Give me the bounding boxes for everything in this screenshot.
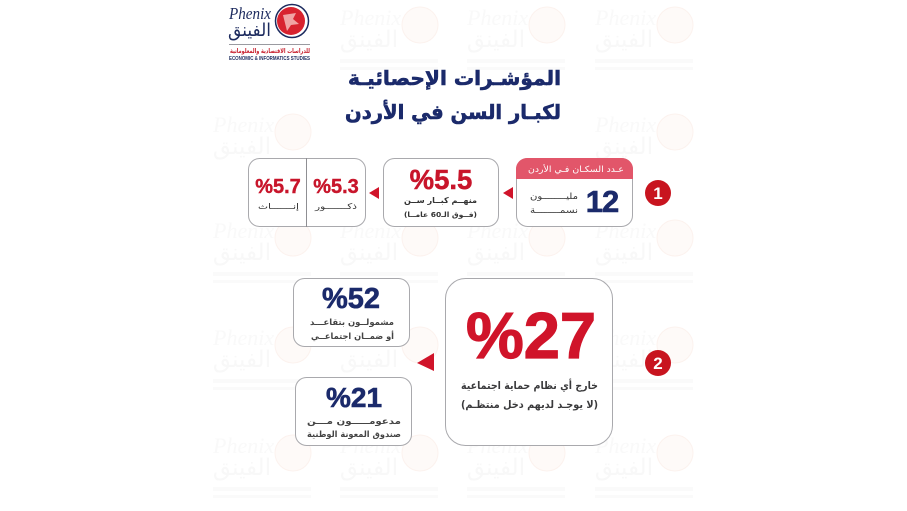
panel: national aid fund (296, 378, 412, 446)
watermark: repeated logo background: Phenix (594, 218, 656, 243)
panel: national aid fund: مدعومـــــون مـــن (307, 417, 401, 427)
population header: عـدد السكـان فـي الأردن (528, 164, 624, 175)
population unit: نسمــــــــة (530, 206, 578, 216)
panel: national aid fund: %21 (326, 382, 382, 413)
watermark: repeated logo background: Phenix (466, 5, 528, 30)
watermark: repeated logo background: Phenix (339, 433, 401, 458)
arrow (503, 187, 513, 199)
watermark: repeated logo background: Phenix (339, 325, 401, 350)
watermark: repeated logo background: الفينق (340, 240, 398, 266)
title: المؤشـرات الإحصائيـة (348, 66, 561, 90)
population unit: مليــــــــون (530, 192, 578, 202)
logo: Phenix Economic and Informatics Studies: الفينق (228, 20, 271, 41)
watermark: repeated logo background: Phenix (212, 325, 274, 350)
panel: elderly share: %5.5 (410, 164, 472, 195)
watermark: repeated logo background: الفينق (595, 134, 653, 160)
watermark: repeated logo background: Phenix (339, 5, 401, 30)
population unit (530, 192, 578, 216)
watermark: repeated logo background (212, 5, 693, 498)
watermark: repeated logo background: Phenix (212, 433, 274, 458)
watermark: repeated logo background: الفينق (213, 455, 271, 481)
watermark: repeated logo background: الفينق (213, 347, 271, 373)
step badge 2: 2 (653, 354, 663, 373)
logo: Phenix Economic and Informatics Studies: Phenix (228, 4, 271, 23)
watermark: repeated logo background: Phenix (339, 218, 401, 243)
males: ذكـــــــور (314, 202, 358, 211)
watermark: repeated logo background: Phenix (594, 5, 656, 30)
watermark: repeated logo background: Phenix (466, 218, 528, 243)
arrow (369, 187, 379, 199)
panel: population (516, 158, 633, 226)
watermark: repeated logo background: Phenix (594, 112, 656, 137)
watermark: repeated logo background: الفينق (213, 240, 271, 266)
population number: 12 (586, 184, 618, 219)
panel: elderly share (384, 158, 498, 226)
females: %5.7 (255, 176, 301, 198)
panel: retirement coverage: أو ضمــان اجتماعــي (311, 330, 394, 342)
males: %5.3 (313, 176, 359, 198)
watermark: repeated logo background: الفينق (595, 455, 653, 481)
panel: retirement coverage: %52 (322, 283, 380, 315)
watermark: repeated logo background: الفينق (340, 27, 398, 53)
panel: national aid fund: صندوق المعونة الوطنية (307, 430, 401, 440)
watermark: repeated logo background: الفينق (467, 27, 525, 53)
panel: outside social protection (446, 278, 612, 446)
watermark: repeated logo background: الفينق (213, 134, 271, 160)
watermark: repeated logo background: Phenix (212, 218, 274, 243)
step badge 2 (645, 350, 671, 376)
watermark: repeated logo background: Phenix (212, 112, 274, 137)
watermark: repeated logo background: الفينق (340, 455, 398, 481)
females: إنـــــــاث (258, 202, 299, 212)
watermark: repeated logo background: الفينق (595, 240, 653, 266)
panel: elderly share: منهــم كبــار ســن (404, 196, 477, 205)
panel: retirement coverage (294, 278, 410, 346)
females (255, 176, 301, 212)
logo: Phenix Economic and Informatics Studies (228, 4, 310, 62)
arrow (417, 353, 434, 371)
panel: retirement coverage: مشمولــون بتقاعـــد (310, 318, 394, 328)
watermark: repeated logo background: الفينق (595, 347, 653, 373)
panel: outside social protection: (لا يوجـد لديهم دخل منتظـم) (461, 399, 598, 411)
panel: outside social protection: خارج أي نظام حماية اجتماعية (461, 378, 598, 392)
title: لكبـار السن في الأردن (345, 99, 561, 125)
watermark: repeated logo background: Phenix (466, 433, 528, 458)
title (345, 66, 561, 125)
watermark: repeated logo background: Phenix (594, 433, 656, 458)
logo: Phenix Economic and Informatics Studies: ECONOMIC & INFORMATICS STUDIES (229, 56, 310, 62)
watermark: repeated logo background: الفينق (340, 347, 398, 373)
step badge 1: 1 (653, 184, 663, 203)
logo: Phenix Economic and Informatics Studies: للدراسات الاقتصادية والمعلوماتية (230, 47, 310, 55)
panel: gender split (248, 158, 366, 227)
panel: elderly share: (فــوق الـ60 عامــا) (404, 211, 477, 219)
watermark: repeated logo background: الفينق (467, 240, 525, 266)
watermark: repeated logo background: Phenix (594, 325, 656, 350)
panel: outside social protection: %27 (466, 299, 596, 372)
watermark: repeated logo background: الفينق (595, 27, 653, 53)
males (313, 176, 359, 211)
step badge 1 (645, 180, 671, 206)
watermark: repeated logo background: الفينق (467, 455, 525, 481)
